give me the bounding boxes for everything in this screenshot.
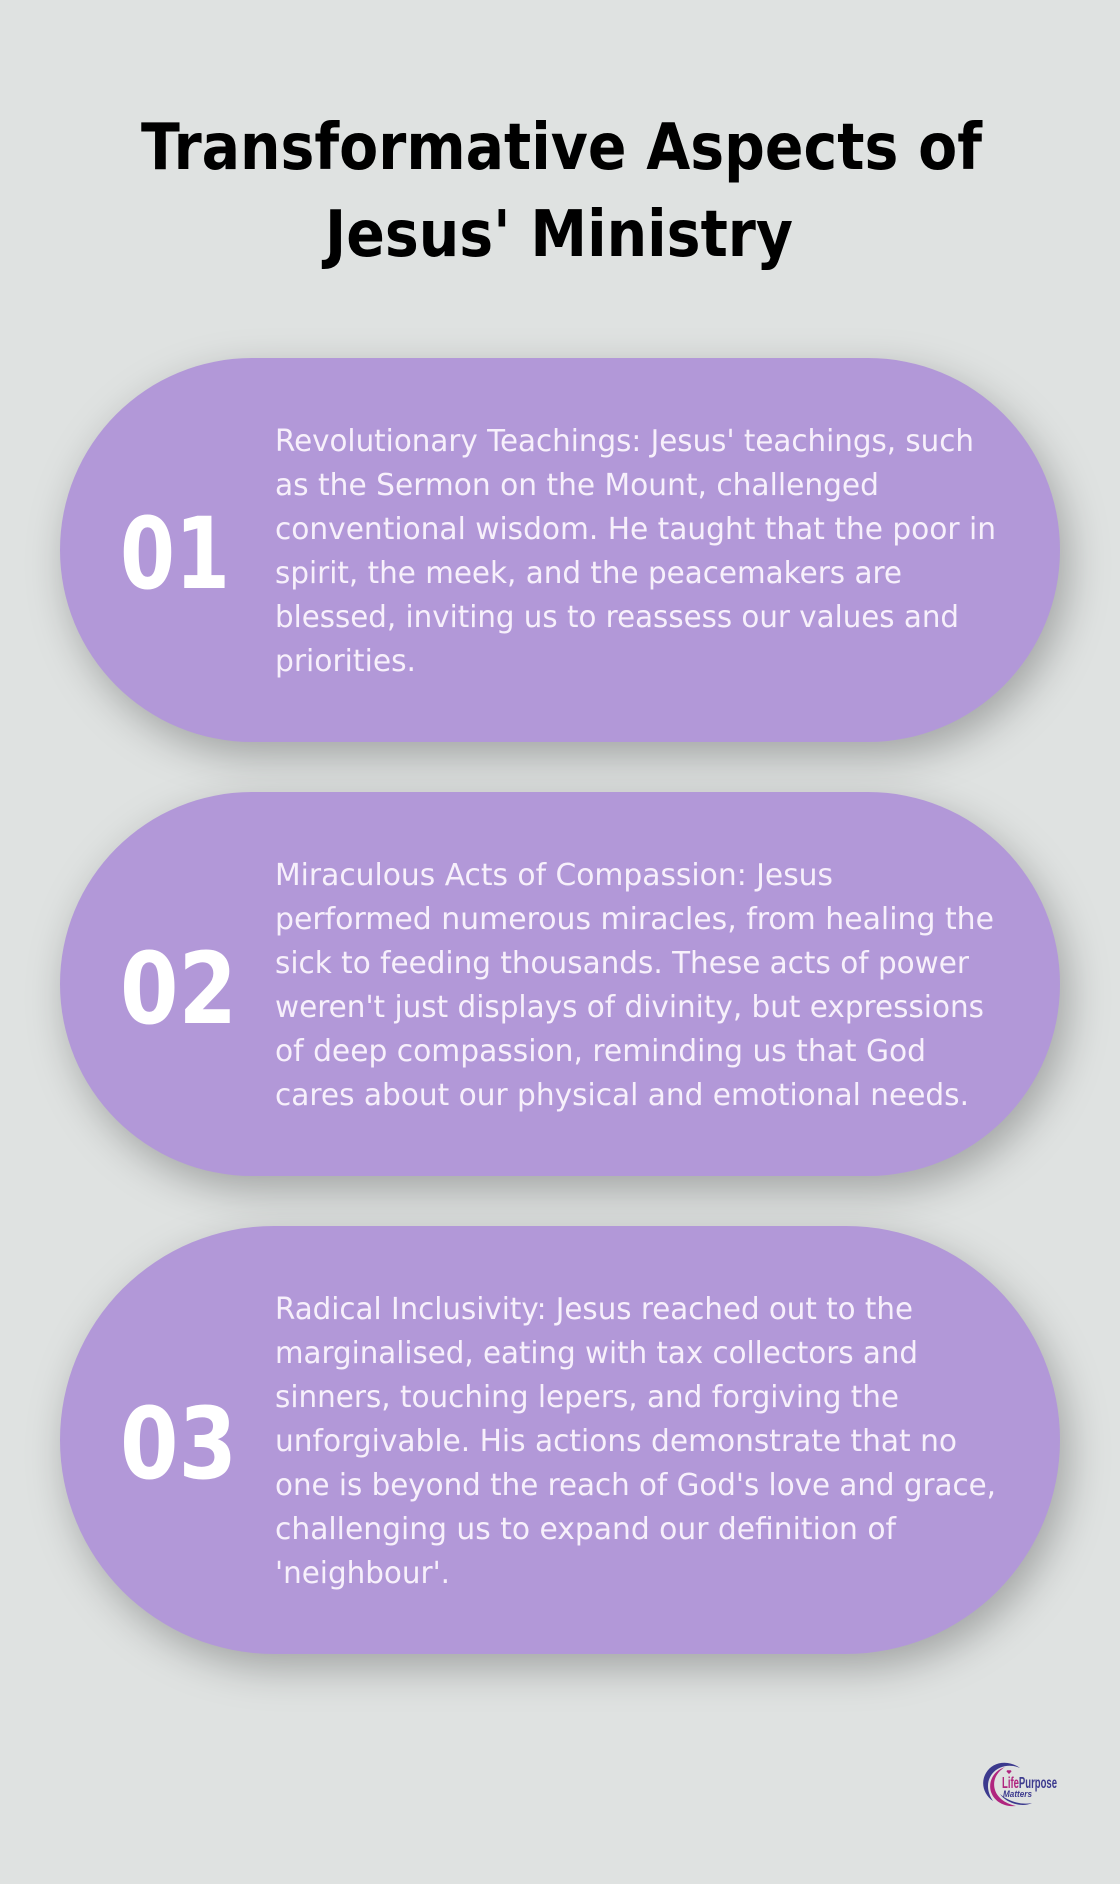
logo: Life Purpose Matters: Matters (1003, 1789, 1032, 1800)
text block: miraculous acts of compassion: performed numerous miracles, from healing the (275, 902, 994, 937)
text block: radical inclusivity: marginalised, eating with tax collectors and (275, 1336, 918, 1371)
text block: radical inclusivity: sinners, touching lepers, and forgiving the (275, 1380, 899, 1415)
logo: Life Purpose Matters: LifePurpose (1002, 1775, 1057, 1792)
text block: miraculous acts of compassion: of deep compassion, reminding us that God (275, 1034, 926, 1069)
text block: revolutionary teachings: Revolutionary Teachings: Jesus' teachings, such (275, 424, 974, 459)
text block: revolutionary teachings: conventional wisdom. He taught that the poor in (275, 512, 996, 547)
text block: radical inclusivity (275, 1292, 996, 1591)
panel: miraculous acts of compassion (60, 792, 1060, 1176)
text block: miraculous acts of compassion (275, 858, 994, 1113)
panel: revolutionary teachings (60, 358, 1060, 742)
text block: revolutionary teachings: priorities. (275, 644, 416, 679)
text block: radical inclusivity: Radical Inclusivity: Jesus reached out to the (275, 1292, 913, 1327)
logo: Life Purpose Matters (983, 1763, 1057, 1806)
text block: revolutionary teachings: spirit, the meek, and the peacemakers are (275, 556, 902, 591)
panel: radical inclusivity (60, 1226, 1060, 1654)
text block: revolutionary teachings: as the Sermon on the Mount, challenged (275, 468, 879, 503)
title: Jesus' Ministry (321, 198, 793, 272)
number 02: 02 (120, 932, 237, 1047)
text block: radical inclusivity: unforgivable. His actions demonstrate that no (275, 1424, 957, 1459)
text block: miraculous acts of compassion: Miraculous Acts of Compassion: Jesus (275, 858, 833, 893)
text block: radical inclusivity: one is beyond the reach of God's love and grace, (275, 1468, 996, 1503)
number 01: 01 (120, 497, 230, 612)
number 03: 03 (120, 1387, 237, 1502)
text block: revolutionary teachings (275, 424, 996, 679)
text block: miraculous acts of compassion: cares about our physical and emotional needs. (275, 1078, 969, 1113)
text block: revolutionary teachings: blessed, inviting us to reassess our values and (275, 600, 959, 635)
text block: miraculous acts of compassion: sick to feeding thousands. These acts of power (275, 946, 970, 981)
text block: radical inclusivity: 'neighbour'. (275, 1556, 450, 1591)
title (141, 111, 983, 272)
title: Transformative Aspects of (141, 111, 983, 185)
text block: radical inclusivity: challenging us to expand our definition of (275, 1512, 897, 1547)
text block: miraculous acts of compassion: weren't just displays of divinity, but expressions (275, 990, 984, 1025)
